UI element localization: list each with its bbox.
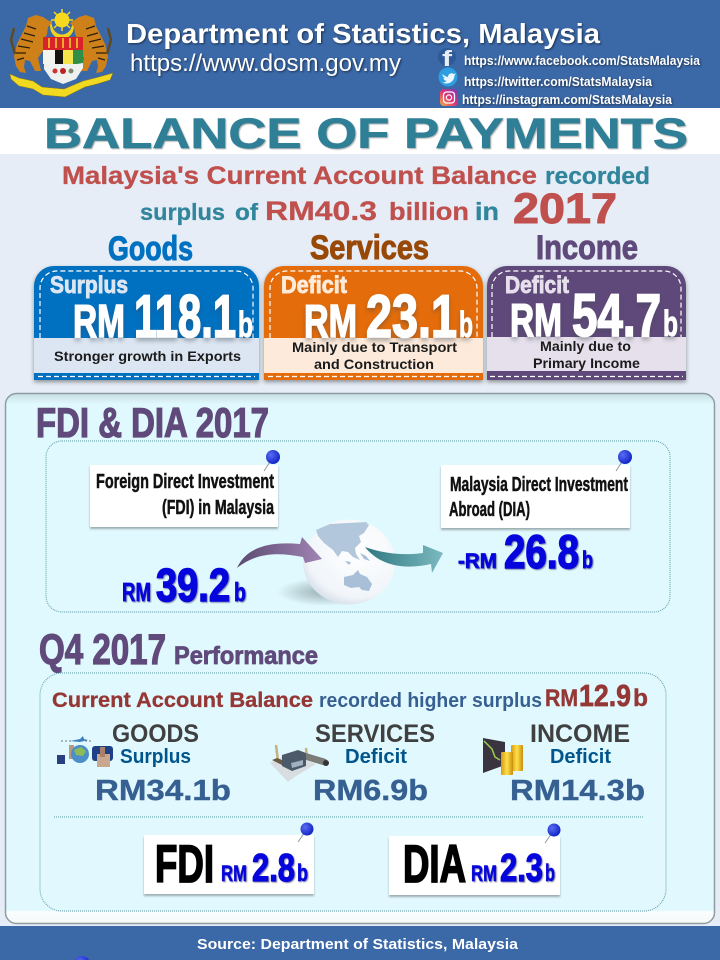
panel: services deficit: Mainly due to Transport [292,339,457,355]
panel: goods surplus: b [238,304,253,345]
panel: services deficit: b [459,304,473,345]
icon: facebook [438,46,456,71]
icon: income [483,738,523,775]
icon: goods [57,736,113,767]
note: Q4 DIA: b [545,860,555,887]
note: Q4 FDI: b [297,860,308,887]
panel: income deficit: 54.7 [572,282,661,349]
value: FDI amount: b [234,577,246,607]
headline: current account balance: of [235,199,258,225]
website url: https://www.dosm.gov.my [130,50,401,77]
panel: services deficit [264,266,483,380]
heading: Q4 2017 performance: Performance [174,642,318,670]
note: DIA: Abroad (DIA) [449,499,530,521]
value: FDI amount: 39.2 [156,559,230,611]
icon: twitter [438,68,458,86]
headline: current account balance [62,162,650,233]
panel: goods surplus: Surplus [50,272,128,299]
text: Q4 current account: 12.9 [579,678,631,713]
label: goods: Surplus [120,746,191,768]
main title band [0,108,720,158]
label: services: Deficit [345,746,407,768]
headline: current account balance: Malaysia's Current Account Balance [62,162,537,190]
label: goods: GOODS [112,720,199,748]
icon: globe [277,520,395,606]
label: income: Deficit [550,746,611,768]
note: Q4 FDI: RM [221,861,247,886]
label: services: RM6.9b [313,775,428,807]
box: FDI and DIA figures [46,441,670,612]
source note: Source: Department of Statistics, Malaysia [197,937,519,953]
panel: services deficit: RM [304,295,357,347]
panel: goods surplus: RM [73,295,125,347]
label: goods: RM34.1b [95,775,231,807]
note: FDI [90,450,280,527]
text: Q4 current account: b [633,685,648,712]
panel: income deficit: Deficit [505,272,569,299]
label: income: INCOME [530,720,630,748]
heading: balance of payments: BALANCE OF PAYMENTS [44,110,688,158]
icon: facebook: f [442,46,453,71]
note: Q4 DIA: RM [471,861,497,886]
text: Q4 current account: recorded higher surplus [319,690,542,712]
twitter link: https://twitter.com/StatsMalaysia [464,74,653,89]
note: DIA: Malaysia Direct Investment [450,474,628,496]
arrow: out of Malaysia [365,545,443,573]
header banner [0,0,720,108]
note: Q4 FDI [144,822,314,894]
value: DIA amount: 26.8 [504,525,579,578]
category heading: income: Income [536,229,638,267]
panel: services deficit: and Construction [314,356,434,372]
label: goods [95,720,231,807]
headline: current account balance: 2017 [513,185,617,233]
panel: income deficit: b [663,303,678,344]
label: services: SERVICES [315,720,435,748]
note: Q4 FDI: 2.8 [252,847,295,890]
headline: current account balance: RM40.3 [265,196,377,226]
text: Q4 current account [52,678,648,713]
facebook link: https://www.facebook.com/StatsMalaysia [464,53,701,68]
note: Q4 DIA: 2.3 [500,847,543,890]
label: income [510,720,645,807]
box: Q4 figures [40,673,666,911]
value: DIA amount: -RM [458,550,497,573]
category heading: services: Services [310,229,429,267]
note: DIA [441,450,632,528]
icon: instagram [440,89,458,106]
value: DIA amount: b [582,547,593,574]
panel: income deficit: Mainly due to [540,338,631,354]
panel: FDI, DIA and Q4 performance [6,394,714,924]
heading: FDI and DIA 2017: FDI & DIA 2017 [36,399,269,446]
note: Q4 FDI: FDI [155,835,214,894]
heading: Q4 2017 performance: Q4 2017 [39,626,166,674]
headline: current account balance: recorded [545,163,650,190]
label: income: RM14.3b [510,775,645,807]
icon: services [270,745,329,782]
heading: Q4 2017 performance [39,626,318,674]
note: FDI: (FDI) in Malaysia [162,497,275,519]
instagram link: https://instagram.com/StatsMalaysia [462,92,673,107]
label: services [313,720,435,807]
panel: income deficit [487,266,686,380]
panel: income deficit: RM [510,294,562,346]
panel: goods surplus [34,266,259,380]
arrow: into Malaysia [237,537,322,568]
value: FDI amount: RM [122,577,151,607]
headline: current account balance: in [475,198,499,226]
footer banner [0,926,720,960]
panel: goods surplus: 118.1 [134,283,236,350]
text: Q4 current account: RM [545,685,578,712]
panel: income deficit: Primary Income [533,355,640,371]
headline: current account balance: surplus [140,199,225,225]
panel: goods surplus: Stronger growth in Exports [54,348,241,364]
text: Q4 current account: Current Account Balance [52,689,313,712]
headline: current account balance: billion [389,198,469,226]
note: FDI: Foreign Direct Investment [96,471,274,493]
note: Q4 DIA [389,824,560,895]
value: DIA amount [458,525,593,578]
category heading: goods: Goods [108,230,193,268]
title: department name: Department of Statistics, Malaysia [126,18,600,49]
note: Q4 DIA: DIA [403,835,466,894]
panel: services deficit: 23.1 [366,283,457,350]
icon: coat of arms [10,9,113,97]
panel: services deficit: Deficit [281,272,347,299]
